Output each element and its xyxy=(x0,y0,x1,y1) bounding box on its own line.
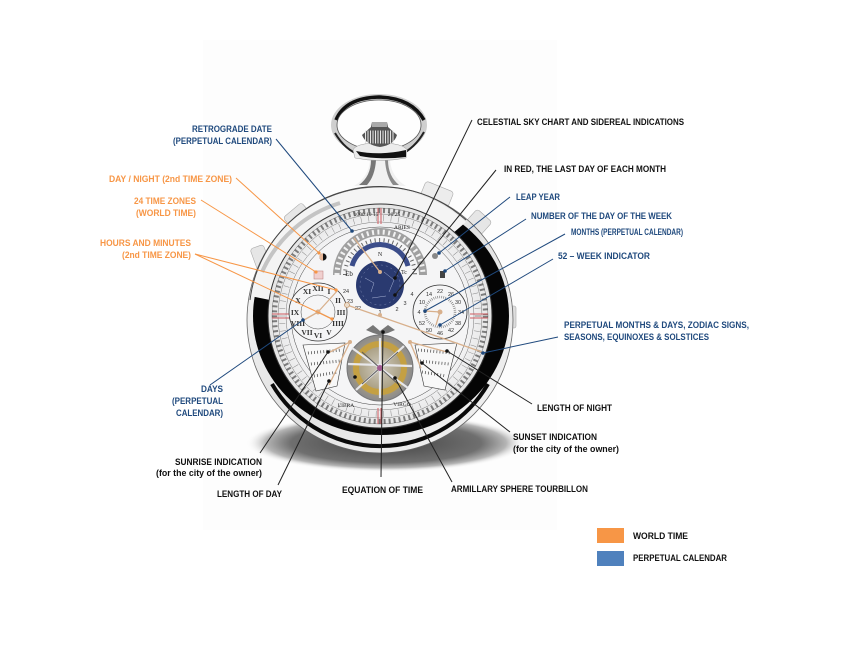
dial: Eb xyxy=(345,270,353,278)
leap year aperture xyxy=(432,253,438,259)
pushers xyxy=(420,181,454,207)
case xyxy=(247,187,513,453)
24 time zones aperture xyxy=(314,271,323,279)
dial: 22 xyxy=(437,289,443,295)
shadow beneath watch xyxy=(246,414,526,472)
label: days: CALENDAR) xyxy=(176,408,223,418)
label: hours and minutes xyxy=(100,238,191,260)
label: sunrise indication: (for the city of the owner) xyxy=(156,468,262,478)
perpetual calendar labels xyxy=(172,124,749,418)
label: number of the day: NUMBER OF THE DAY OF THE WEEK xyxy=(531,211,672,221)
dial: Tc xyxy=(401,270,407,276)
label: perpetual months and days xyxy=(564,320,749,342)
dial: IX xyxy=(291,308,300,317)
week-day aperture xyxy=(440,271,445,278)
legend: perpetual calendar: PERPETUAL CALENDAR xyxy=(633,553,727,563)
lower left sector xyxy=(303,343,345,391)
dial: 38 xyxy=(455,321,461,327)
label: last day of month: IN RED, THE LAST DAY OF EACH MONTH xyxy=(504,164,666,174)
gold hands xyxy=(304,238,482,385)
bow ring xyxy=(334,97,424,153)
label: armillary sphere tourbillon: ARMILLARY SPHERE TOURBILLON xyxy=(451,484,588,494)
label: days: DAYS xyxy=(201,384,223,394)
pocket watch xyxy=(247,97,516,453)
pendant neck xyxy=(354,158,406,186)
astronomy and time labels xyxy=(156,117,684,499)
label: hours and minutes: HOURS AND MINUTES xyxy=(100,238,191,248)
label: 24 time zones: 24 TIME ZONES xyxy=(134,196,196,206)
label: sunset indication xyxy=(513,432,619,454)
dial xyxy=(268,204,492,428)
label: perpetual months and days: PERPETUAL MONTHS & DAYS, ZODIAC SIGNS, xyxy=(564,320,749,330)
label: day/night: DAY / NIGHT (2nd TIME ZONE) xyxy=(109,174,232,184)
right subdial xyxy=(413,285,467,339)
dial: III xyxy=(337,308,345,317)
label: days: (PERPETUAL xyxy=(172,396,223,406)
label: length of night: LENGTH OF NIGHT xyxy=(537,403,612,413)
dial: 46 xyxy=(437,331,443,337)
equation of time wings xyxy=(366,325,395,335)
dial: 14 xyxy=(426,292,432,298)
dial scale labels: 1000 10 15 xyxy=(354,212,379,218)
label: length of day: LENGTH OF DAY xyxy=(217,489,282,499)
dial: LIBRA xyxy=(338,403,354,409)
sidereal numbers: 23 xyxy=(347,299,353,305)
sidereal numbers: 2 xyxy=(395,307,399,313)
black leader lines xyxy=(260,120,532,485)
dial: VII xyxy=(301,328,313,337)
legend xyxy=(597,528,727,566)
bezel reflection xyxy=(250,188,466,300)
label: sunset indication: SUNSET INDICATION xyxy=(513,432,597,442)
legend: world time: WORLD TIME xyxy=(633,531,688,541)
minute rings xyxy=(272,208,488,424)
sidereal numbers: 4 xyxy=(410,292,414,298)
dial: VI xyxy=(314,331,322,340)
crown xyxy=(362,122,397,147)
dial: V xyxy=(326,328,332,337)
sidereal blue arc xyxy=(352,245,408,266)
dial: XII xyxy=(312,284,324,293)
sidereal numbers: 22 xyxy=(355,306,361,312)
dial: II xyxy=(335,296,341,305)
dial: 20 25 xyxy=(388,212,400,218)
dial: 30 xyxy=(455,300,461,306)
dial: VIII xyxy=(291,319,305,328)
label: perpetual months and days: SEASONS, EQUINOXES & SOLSTICES xyxy=(564,332,709,342)
label: 52-week indicator: 52 – WEEK INDICATOR xyxy=(558,251,650,261)
sidereal numbers xyxy=(343,289,414,316)
label: 24 time zones xyxy=(134,196,196,218)
dial: 26 xyxy=(448,292,454,298)
leader line end markers xyxy=(301,229,485,383)
label: celestial sky chart: CELESTIAL SKY CHART AND SIDEREAL INDICATIONS xyxy=(477,117,684,127)
left subdial xyxy=(289,283,347,341)
label: months: MONTHS (PERPETUAL CALENDAR) xyxy=(571,227,683,237)
label: sunrise indication xyxy=(156,457,262,478)
red solstice markers xyxy=(272,208,488,424)
black reflection band xyxy=(253,197,509,435)
celestial chart xyxy=(356,261,404,309)
dial: XI xyxy=(303,287,311,296)
label: equation of time: EQUATION OF TIME xyxy=(342,485,423,495)
label: sunset indication: (for the city of the owner) xyxy=(513,444,619,454)
inner plain dial xyxy=(292,228,468,404)
label: sunrise indication: SUNRISE INDICATION xyxy=(175,457,262,467)
dial: N xyxy=(378,252,383,258)
dial: 50 xyxy=(426,328,432,334)
dial: 52 xyxy=(419,321,425,327)
dial: VIRGO xyxy=(393,402,411,408)
blue leader lines xyxy=(210,139,565,385)
sidereal numbers: 3 xyxy=(403,301,407,307)
pendant shoulder xyxy=(353,143,407,160)
lower right sector xyxy=(415,343,457,390)
label: leap year: LEAP YEAR xyxy=(516,192,560,202)
label: retrograde date: RETROGRADE DATE xyxy=(192,124,272,134)
day/night aperture xyxy=(319,253,327,261)
dial: 42 xyxy=(448,328,454,334)
dial: IIII xyxy=(332,319,344,328)
orange leader lines xyxy=(195,178,336,319)
label: days xyxy=(172,384,223,418)
dial: X xyxy=(295,296,301,305)
label: retrograde date xyxy=(173,124,272,146)
sidereal numbers: 1 xyxy=(378,310,382,316)
label: 24 time zones: (WORLD TIME) xyxy=(136,208,196,218)
label: hours and minutes: (2nd TIME ZONE) xyxy=(122,250,191,260)
dial: I xyxy=(328,287,331,296)
dial: 34 xyxy=(458,310,464,316)
tourbillon xyxy=(347,335,413,401)
dial: ARIES xyxy=(394,225,410,231)
dial: 4 xyxy=(417,310,421,316)
dial: 10 xyxy=(419,300,425,306)
photo background xyxy=(203,40,557,530)
world time labels xyxy=(100,174,232,260)
retrograde date arc xyxy=(337,232,423,275)
sidereal numbers: 24 xyxy=(343,289,349,295)
lower rim line xyxy=(272,384,488,446)
label: retrograde date: (PERPETUAL CALENDAR) xyxy=(173,136,272,146)
